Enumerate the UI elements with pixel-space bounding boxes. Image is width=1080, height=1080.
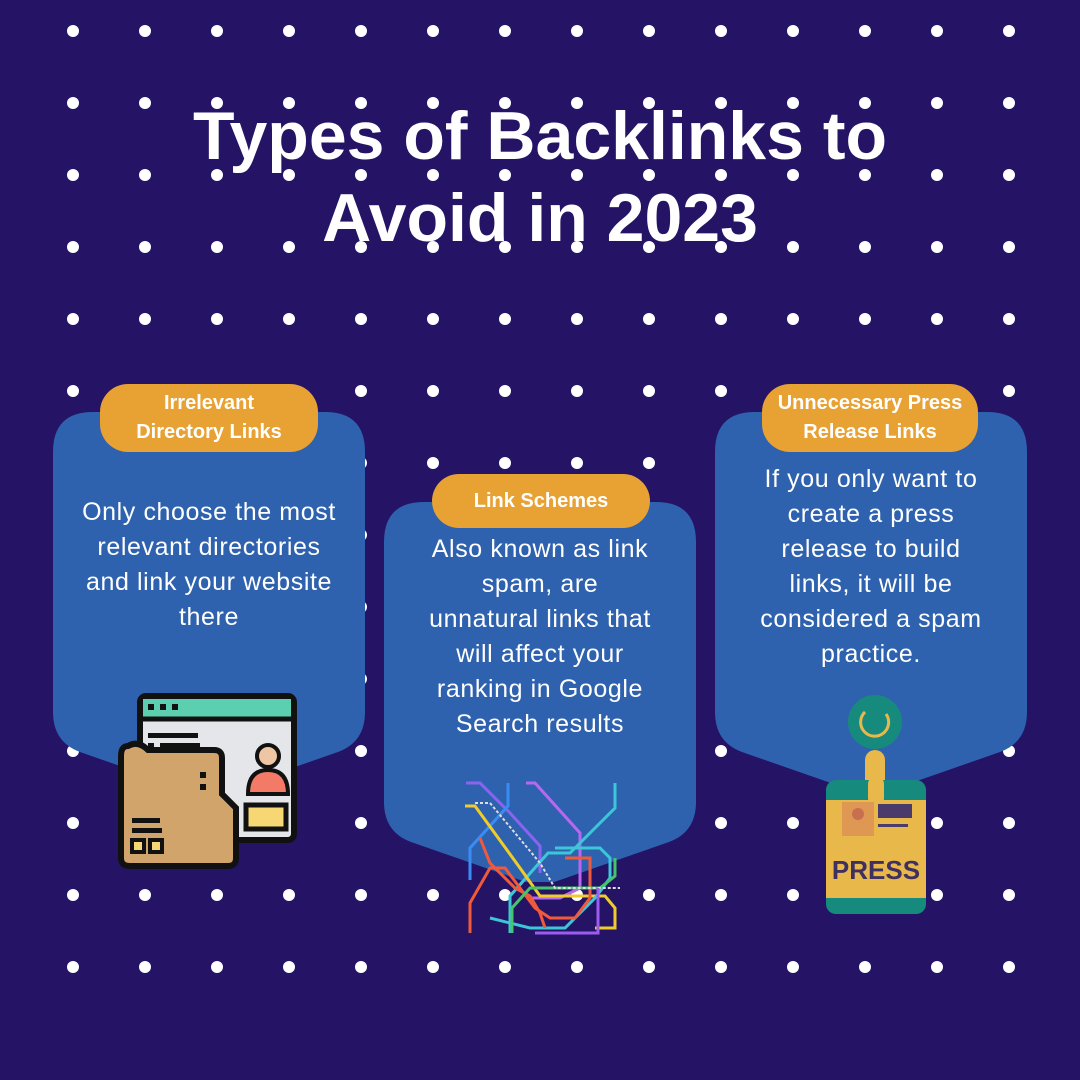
body text: unnatural links that — [429, 605, 651, 633]
body text: links, it will be — [789, 570, 953, 598]
body text: will affect your — [456, 640, 624, 668]
icon: metro map link network — [465, 782, 620, 934]
body text: create a press — [788, 500, 954, 528]
panel: irrelevant directory links — [53, 412, 365, 766]
tag: unnecessary press release links: Release Links — [803, 421, 937, 443]
body text: relevant directories — [97, 533, 321, 561]
body text — [82, 498, 336, 631]
tag: irrelevant directory links: Irrelevant — [164, 392, 254, 414]
body text: considered a spam — [760, 605, 982, 633]
body text: there — [179, 603, 239, 631]
tag: link schemes — [432, 474, 650, 528]
body text: spam, are — [482, 570, 598, 598]
body text: If you only want to — [765, 465, 977, 493]
icon: press badge — [826, 695, 926, 914]
tag: irrelevant directory links: Directory Links — [136, 421, 282, 443]
icon: press badge: PRESS — [832, 855, 920, 885]
body text: Search results — [456, 710, 624, 738]
tag: irrelevant directory links — [100, 384, 318, 452]
panel: press release links — [715, 412, 1027, 782]
tag: unnecessary press release links — [762, 384, 978, 452]
body text: Only choose the most — [82, 498, 336, 526]
title — [193, 98, 887, 256]
title: Types of Backlinks to — [193, 98, 887, 174]
panel: link schemes — [384, 502, 696, 882]
title: Avoid in 2023 — [322, 180, 758, 256]
tag: unnecessary press release links: Unnecessary Press — [778, 392, 962, 414]
icon: directory folder — [118, 693, 297, 869]
body text: and link your website — [86, 568, 332, 596]
body text: practice. — [821, 640, 921, 668]
body text: ranking in Google — [437, 675, 643, 703]
body text — [429, 535, 651, 738]
body text: release to build — [781, 535, 961, 563]
body text — [760, 465, 982, 668]
body text: Also known as link — [432, 535, 648, 563]
tag: link schemes: Link Schemes — [474, 490, 608, 512]
